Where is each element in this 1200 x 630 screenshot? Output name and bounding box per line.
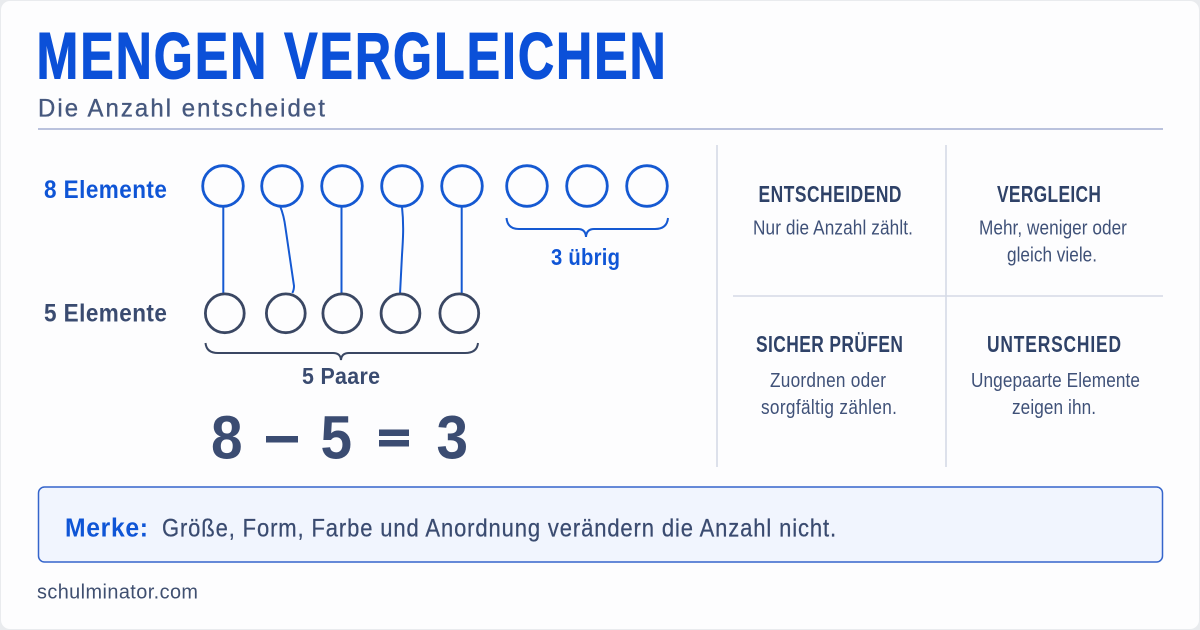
cell: Vergleich — [979, 182, 1127, 266]
callout: Merke — [38, 487, 1162, 562]
cell: Sicher prüfen — [756, 332, 903, 418]
panel: fact grid — [717, 145, 1163, 467]
label: 8 Elemente: 8 Elemente — [44, 176, 167, 204]
bottom row: 5 circles — [205, 294, 479, 333]
brace: 3 übrig — [506, 218, 668, 237]
callout: Merke: Größe, Form, Farbe und Anordnung verändern die Anzahl nicht. — [162, 514, 836, 542]
label: 5 Paare: 5 Paare — [302, 363, 380, 389]
cell: Unterschied: Ungepaarte Elemente — [971, 369, 1140, 391]
cell: Vergleich: VERGLEICH — [997, 182, 1101, 208]
title: MENGEN VERGLEICHEN — [36, 20, 666, 93]
cell: Entscheidend — [753, 182, 913, 239]
cell: Sicher prüfen: sorgfältig zählen. — [761, 396, 897, 418]
cell: Unterschied: zeigen ihn. — [1012, 396, 1096, 418]
equation — [211, 405, 468, 472]
top row: 8 circles — [203, 166, 667, 206]
callout: Merke: Merke: — [65, 514, 148, 543]
cell: Unterschied: UNTERSCHIED — [987, 332, 1121, 358]
cell: Vergleich: gleich viele. — [1007, 243, 1097, 266]
label: 5 Elemente: 5 Elemente — [44, 299, 167, 328]
cell: Vergleich: Mehr, weniger oder — [979, 216, 1127, 239]
subtitle: Die Anzahl entscheidet — [38, 95, 325, 123]
cell: Entscheidend: ENTSCHEIDEND — [758, 182, 902, 208]
equation: 5 — [320, 405, 352, 472]
cell: Entscheidend: Nur die Anzahl zählt. — [753, 216, 913, 239]
cell: Sicher prüfen: Zuordnen oder — [770, 369, 886, 391]
connecting lines between pairs — [223, 206, 462, 294]
label: 3 übrig: 3 übrig — [551, 244, 620, 270]
brace: 5 Paare — [206, 343, 478, 360]
equation: 8 — [211, 405, 243, 472]
panel: pairing diagram — [44, 166, 668, 472]
equation: 3 — [436, 405, 468, 472]
cell: Unterschied — [971, 332, 1140, 418]
footer source: schulminator.com — [37, 581, 198, 604]
cell: Sicher prüfen: SICHER PRÜFEN — [756, 332, 903, 358]
